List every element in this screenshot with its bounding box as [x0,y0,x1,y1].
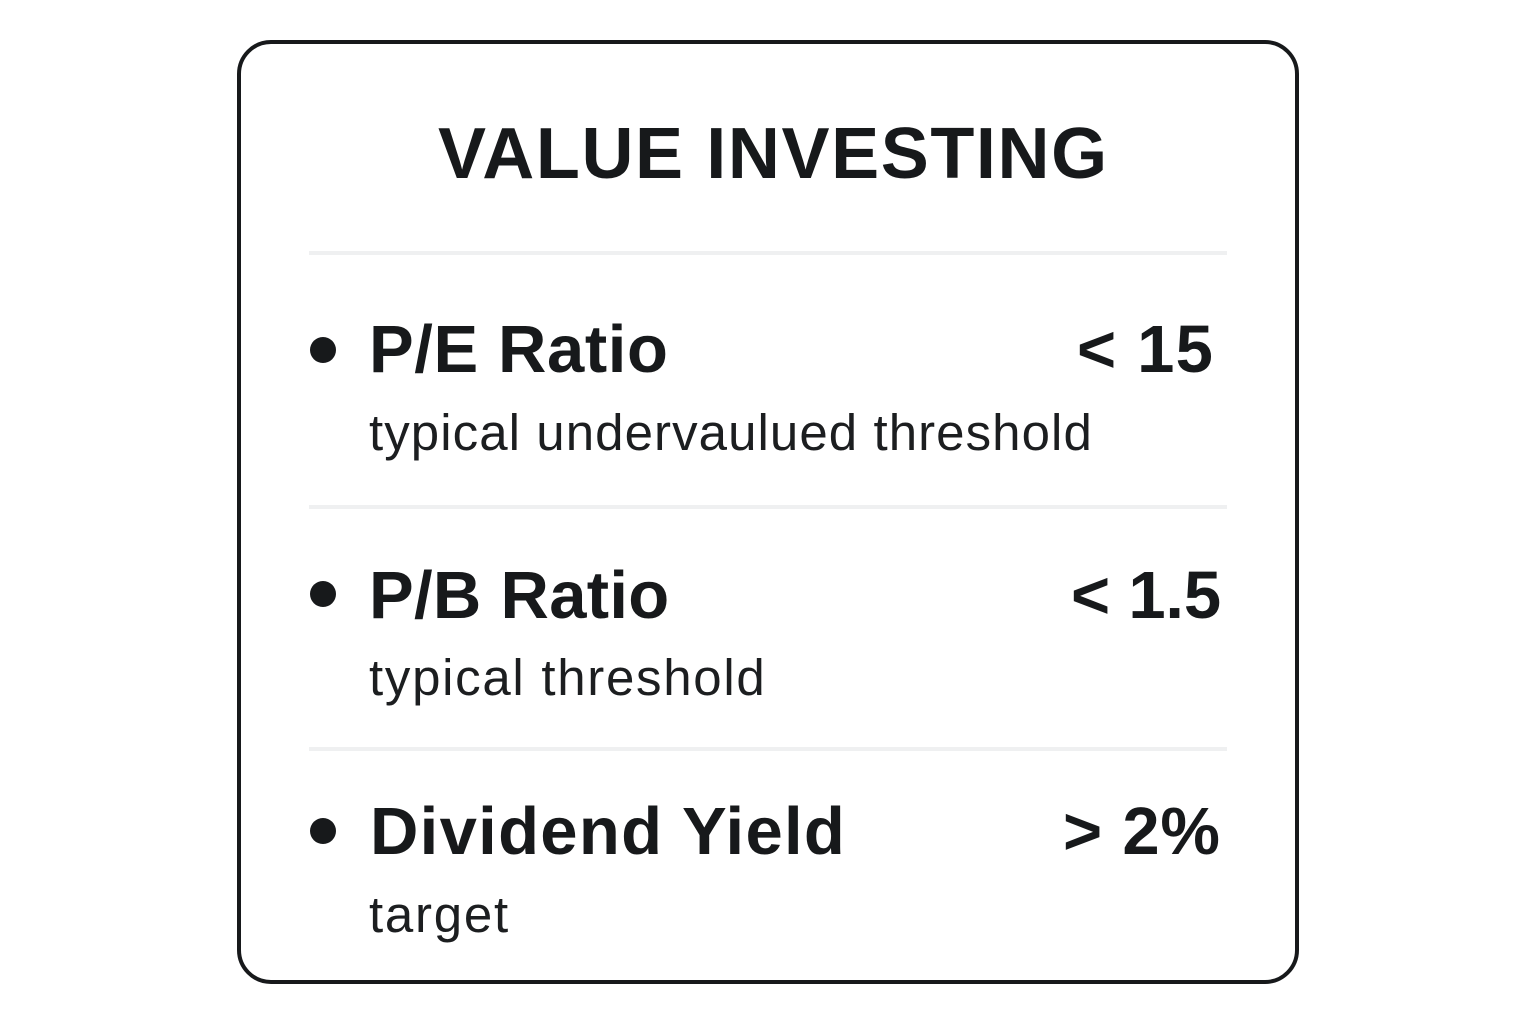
title: VALUE INVESTING [438,114,1109,194]
description: dividend: target [369,886,510,943]
icon: bullet P/E [310,337,336,363]
icon: bullet P/B [310,581,336,607]
value: P/B threshold: < 1.5 [1071,558,1221,633]
label: P/E Ratio: P/E Ratio [369,312,669,387]
label: Dividend Yield: Dividend Yield [370,794,846,869]
panel: value investing card [237,40,1299,984]
value: P/E threshold: < 15 [1077,312,1214,387]
description: P/B: typical threshold [369,649,766,706]
description: P/E: typical undervaulued threshold [369,404,1093,461]
icon: bullet dividend [310,818,336,844]
value: dividend target: > 2% [1063,794,1221,869]
label: P/B Ratio: P/B Ratio [369,558,670,633]
